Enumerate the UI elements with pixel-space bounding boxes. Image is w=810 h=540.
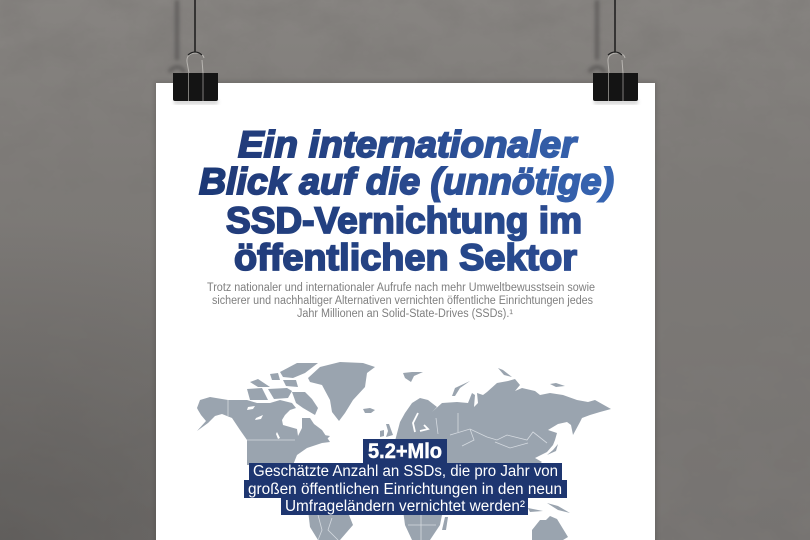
Iceland: [363, 408, 375, 413]
title: Ein internationaler: [238, 123, 578, 165]
callout: 5.2+ million SSDs: [244, 439, 567, 515]
statistic description: [248, 463, 562, 515]
paper poster: [154, 81, 657, 540]
icon: left binder clip with string: [169, 0, 218, 104]
title: öffentlichen Sektor: [234, 236, 577, 278]
world map: [197, 362, 611, 540]
statistic description: Umfrageländern vernichtet werden²: [285, 498, 525, 515]
South America: [308, 510, 353, 540]
title: Blick auf die (unnötige): [199, 160, 614, 202]
statistic description: Geschätzte Anzahl an SSDs, die pro Jahr von: [253, 463, 558, 480]
intro text: sicherer und nachhaltiger Alternativen vernichten öffentliche Einrichtungen jedes: [212, 295, 593, 307]
intro text: Jahr Millionen an Solid-State-Drives (SSDs).¹: [297, 308, 513, 320]
Greenland: [308, 362, 375, 421]
statistic description: großen öffentlichen Einrichtungen in den neun: [248, 481, 562, 498]
intro text: [207, 282, 595, 320]
statistic value: 5.2+Mlo: [368, 440, 442, 463]
British Isles: [380, 424, 393, 437]
title: [199, 123, 614, 278]
Oceania: [528, 503, 570, 540]
title: SSD-Vernichtung im: [226, 199, 582, 241]
intro text: Trotz nationaler und internationaler Aufrufe nach mehr Umweltbewusstsein sowie: [207, 282, 595, 294]
Africa: [403, 510, 448, 540]
icon: right binder clip with string: [589, 0, 638, 104]
Eurasia: [395, 368, 611, 470]
North America: [197, 363, 330, 465]
